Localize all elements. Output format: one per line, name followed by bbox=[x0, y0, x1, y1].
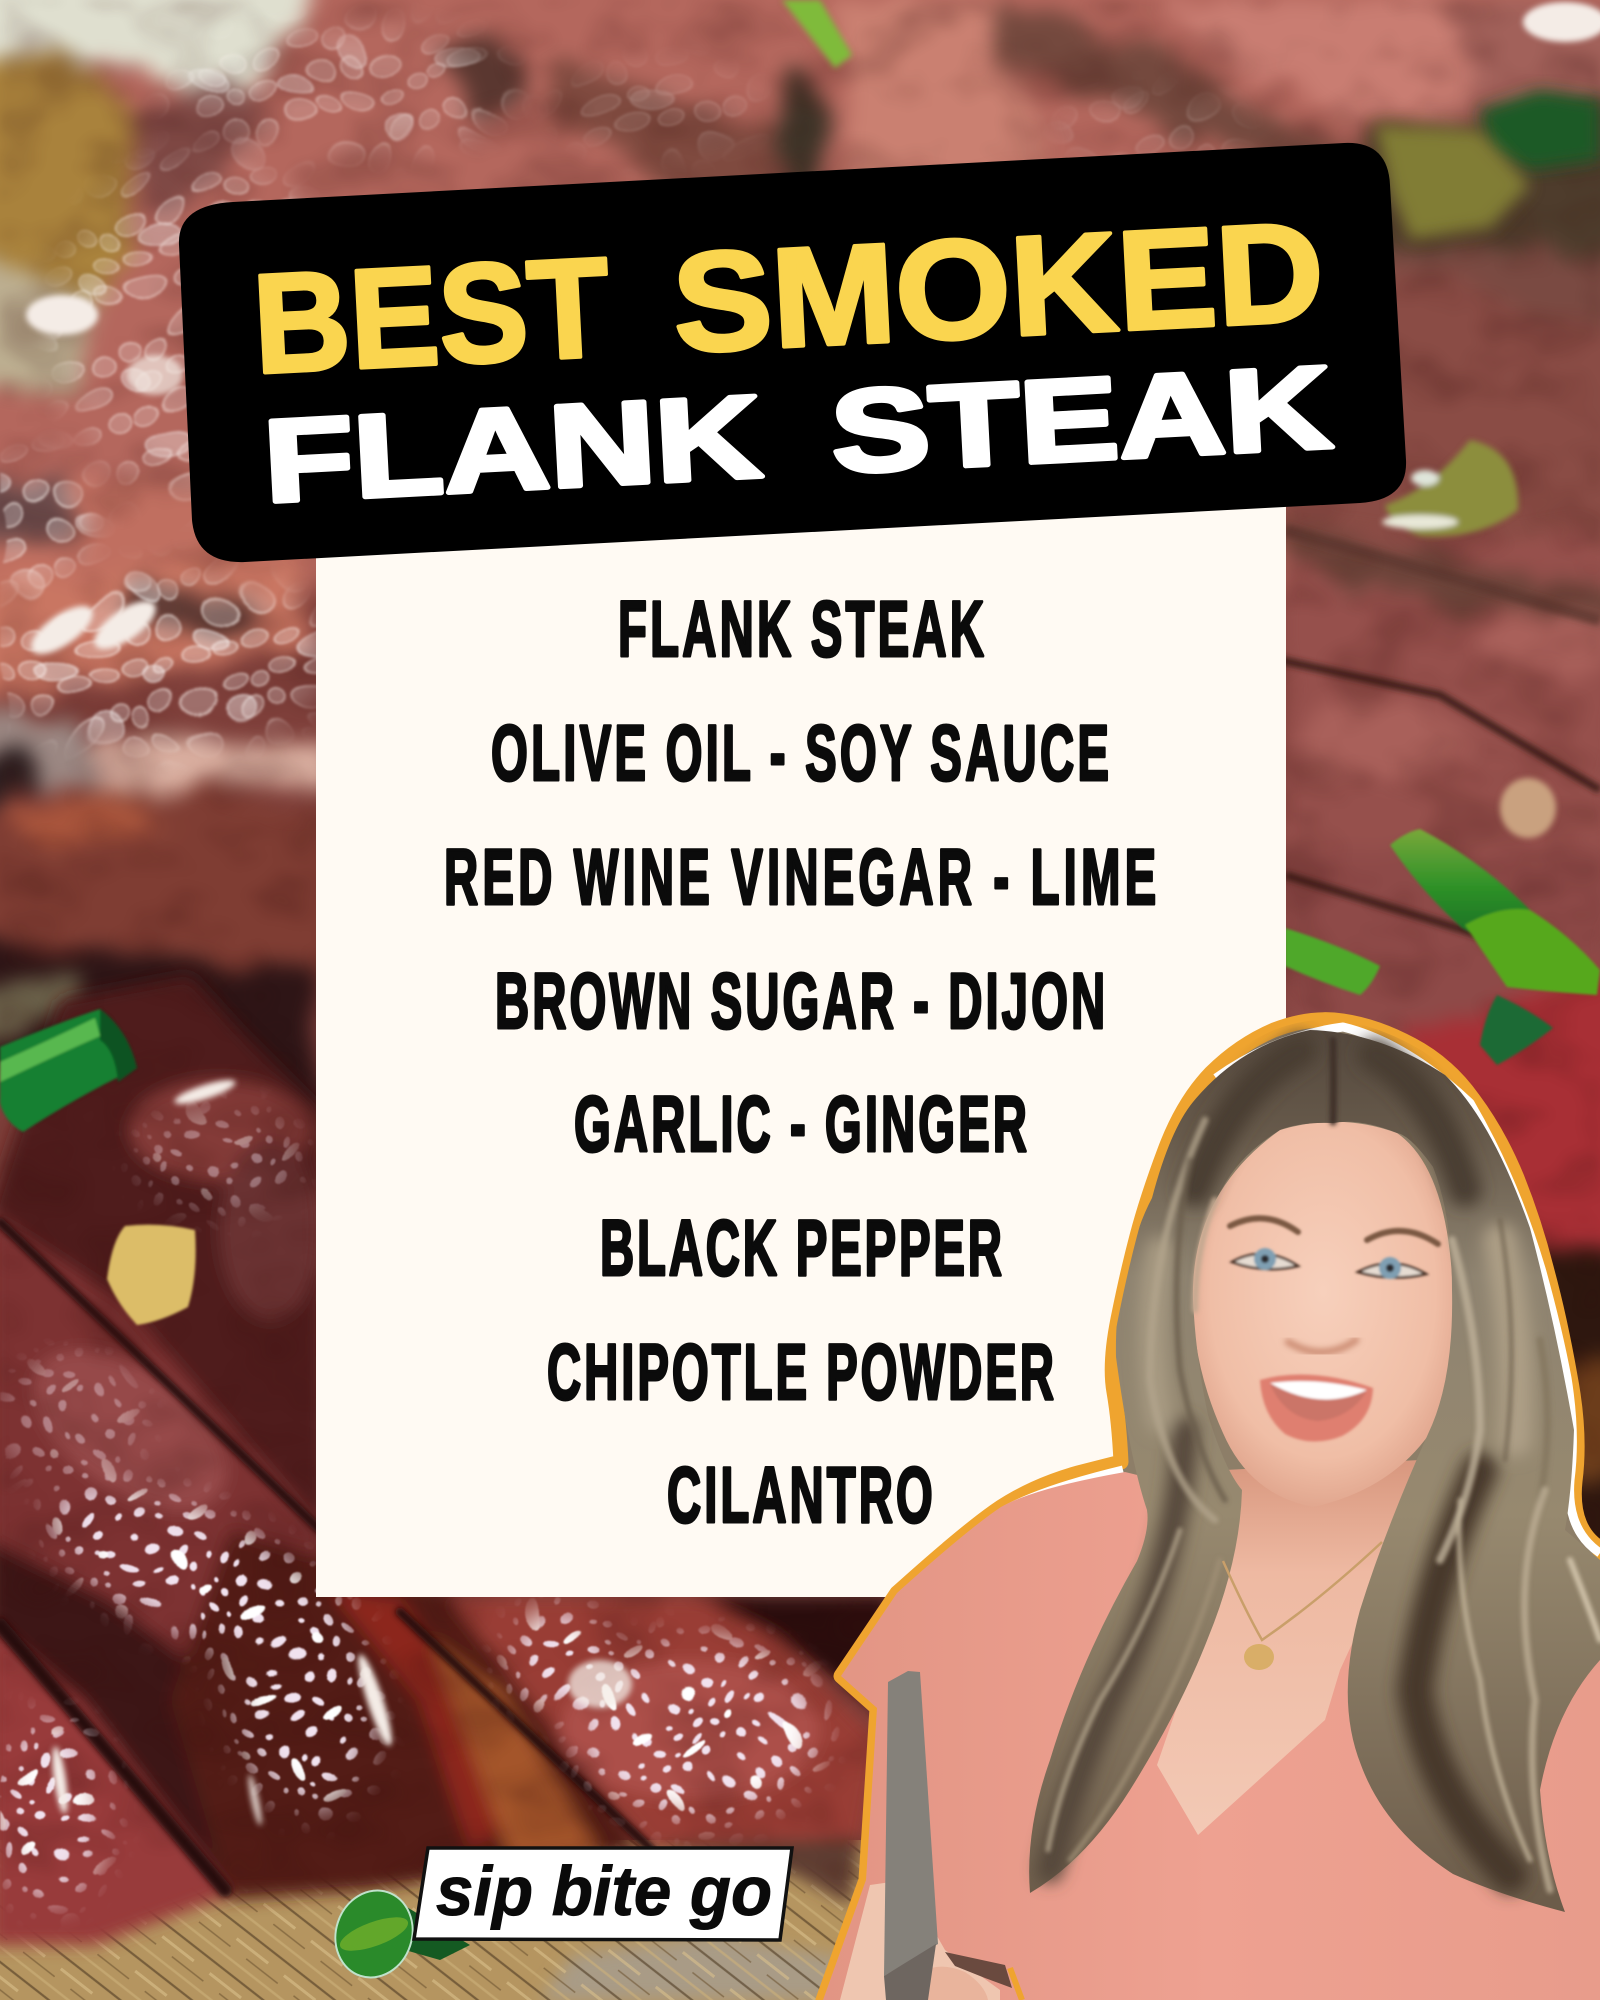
face bbox=[1193, 1122, 1453, 1507]
ingredient list: OLIVE OIL - SOY SAUCE bbox=[491, 708, 1109, 797]
dark leaf bbox=[1480, 995, 1553, 1065]
ingredient list: RED WINE VINEGAR - LIME bbox=[444, 832, 1156, 921]
orange outline bbox=[823, 1020, 1600, 2000]
necklace bbox=[1223, 1542, 1382, 1670]
white inner outline bbox=[1002, 1027, 1600, 1553]
glossy glaze specks bbox=[0, 1094, 840, 1922]
ingredient list: BROWN SUGAR - DIJON bbox=[495, 956, 1105, 1045]
ingredient list: BLACK PEPPER bbox=[600, 1203, 1002, 1292]
green onion top stem bbox=[782, 0, 852, 68]
gristle right bbox=[1500, 778, 1556, 838]
dark lines between slices bbox=[0, 1222, 652, 1890]
title line 1: SMOKED bbox=[669, 192, 1327, 382]
olive onion top right bbox=[1375, 125, 1530, 240]
title banner bbox=[179, 143, 1406, 562]
hair bbox=[1029, 1030, 1600, 1912]
dark green chive top right bbox=[1480, 90, 1600, 170]
hair strands bbox=[1048, 1040, 1600, 1890]
title line 2: STEAK bbox=[828, 341, 1335, 498]
panel: ingredients bbox=[316, 480, 1286, 1597]
chest and neck bbox=[1157, 1460, 1420, 1835]
olive onion right bbox=[1382, 440, 1518, 536]
scallion right bbox=[1390, 829, 1600, 995]
scallion bottom bbox=[324, 1880, 470, 1988]
arm and hand bbox=[840, 1880, 1022, 2000]
ingredient list: CHIPOTLE POWDER bbox=[547, 1327, 1054, 1416]
left mid dark meat bbox=[0, 785, 340, 985]
title line 2: FLANK bbox=[261, 370, 765, 527]
knife bbox=[884, 1671, 938, 2000]
ingredient list bbox=[444, 584, 1156, 1539]
dress bbox=[823, 1472, 1600, 2000]
wood cutting board bbox=[0, 1840, 900, 2000]
garlic piece bbox=[107, 1225, 196, 1325]
nose bbox=[1288, 1340, 1356, 1352]
right side meat score lines bbox=[1280, 530, 1600, 935]
ingredient list: CILANTRO bbox=[667, 1450, 933, 1539]
eyes bbox=[1232, 1248, 1426, 1279]
eyebrows bbox=[1230, 1218, 1438, 1244]
bubbles on the meat surface bbox=[0, 17, 1234, 756]
title line 1: BEST bbox=[250, 227, 613, 403]
logo: sip bite go: sip bite go bbox=[436, 1852, 772, 1930]
person cutout bbox=[823, 1020, 1600, 2000]
top meat and corner tones bbox=[0, 0, 1600, 1110]
lower left meat slices bbox=[0, 975, 890, 1945]
hair tone masses bbox=[1050, 1050, 1516, 1875]
right side sliced meat bbox=[1280, 530, 1600, 1570]
title line 1 bbox=[250, 192, 1327, 403]
title line 2 bbox=[261, 341, 1335, 527]
ingredient list: GARLIC - GINGER bbox=[574, 1079, 1027, 1168]
ingredient list: FLANK STEAK bbox=[618, 584, 984, 673]
mouth bbox=[1260, 1375, 1373, 1442]
scallion left bbox=[0, 1009, 137, 1132]
scallion small bbox=[1285, 928, 1380, 995]
